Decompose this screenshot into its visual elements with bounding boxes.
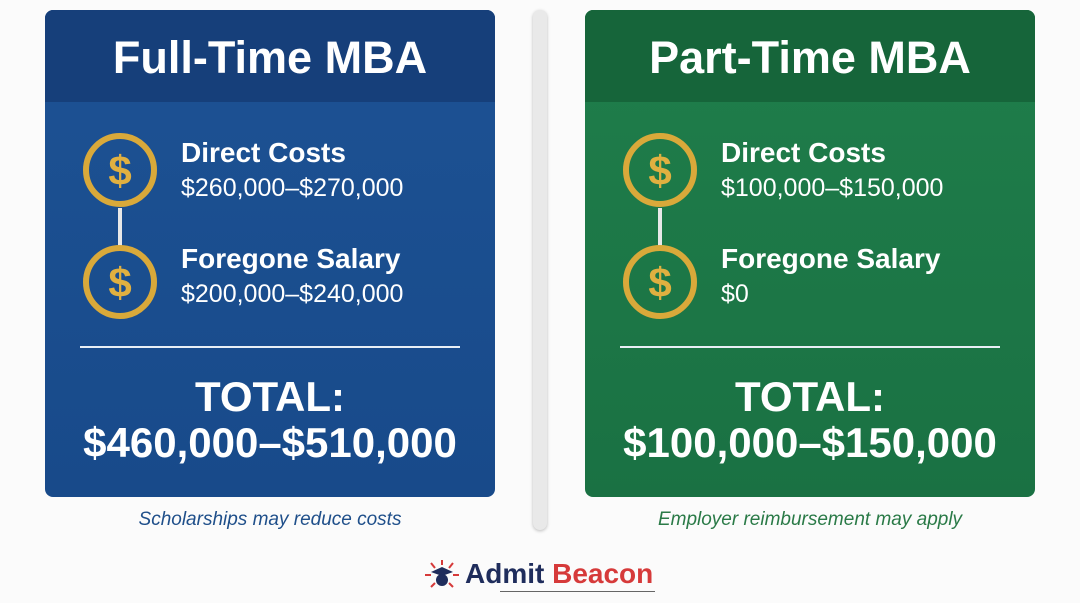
total: TOTAL: (195, 373, 345, 420)
label: foregone salary: Foregone Salary (181, 243, 400, 274)
label: foregone salary: Foregone Salary (721, 243, 940, 274)
center divider (533, 10, 547, 530)
icon: beacon cap (425, 560, 459, 588)
total: TOTAL: (735, 373, 885, 420)
heading: Full-Time MBA (45, 10, 495, 102)
value: direct costs: $260,000–$270,000 (181, 174, 403, 202)
icon: coin direct costs (83, 133, 157, 207)
label: direct costs: Direct Costs (181, 137, 346, 168)
total (623, 373, 997, 466)
connector (118, 208, 122, 248)
panel: full-time MBA (45, 10, 495, 497)
icon: coin foregone salary (83, 245, 157, 319)
icon: coin foregone salary (623, 245, 697, 319)
heading: Full-Time MBA: Full-Time MBA (113, 32, 427, 83)
caption: scholarships: Scholarships may reduce costs (139, 509, 401, 530)
connector (658, 208, 662, 248)
value: foregone salary: $0 (721, 280, 749, 308)
heading: Part-Time MBA: Part-Time MBA (649, 32, 971, 83)
icon: coin foregone salary: $ (648, 259, 672, 306)
icon: coin direct costs: $ (648, 147, 672, 194)
heading: Part-Time MBA (585, 10, 1035, 102)
value: direct costs: $100,000–$150,000 (721, 174, 943, 202)
value: foregone salary: $200,000–$240,000 (181, 280, 403, 308)
logo: Admit Beacon: Admit Beacon (465, 558, 653, 589)
total: $460,000–$510,000 (83, 419, 457, 466)
label: direct costs: Direct Costs (721, 137, 886, 168)
panel: part-time MBA (585, 10, 1035, 497)
total: $100,000–$150,000 (623, 419, 997, 466)
icon: coin direct costs: $ (108, 147, 132, 194)
total (83, 373, 457, 466)
caption: employer reimbursement: Employer reimbursement may apply (658, 509, 962, 530)
icon: coin direct costs (623, 133, 697, 207)
icon: coin foregone salary: $ (108, 259, 132, 306)
